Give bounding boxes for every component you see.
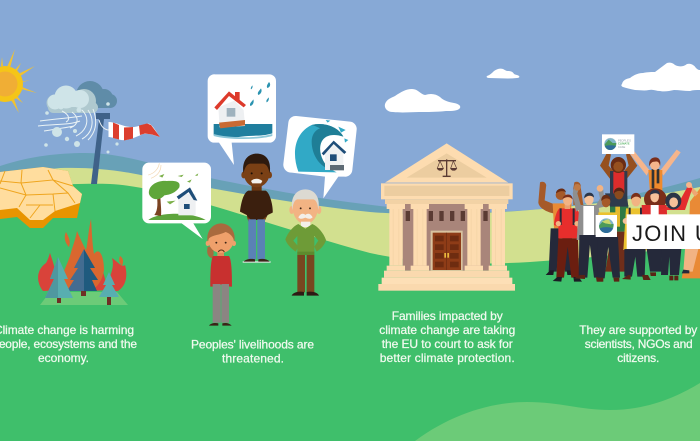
- steps: [378, 271, 515, 291]
- supporter: woman raised on shoulders, brown arms: [600, 153, 637, 203]
- supporter: man in orange, fists raised: [538, 182, 583, 275]
- panel: people and their livelihoods: [142, 74, 357, 326]
- text: families taking EU to court: the EU to court to ask for: [382, 337, 513, 351]
- text: families taking EU to court: climate change are taking: [379, 323, 515, 337]
- figure: older man in green sweater: [285, 189, 326, 296]
- wall: [403, 203, 490, 271]
- icon: scales of justice: [437, 159, 457, 176]
- hill: teal back: [0, 153, 700, 441]
- panel: crowd of supporters: [538, 134, 700, 282]
- cloud: large right: [621, 63, 700, 91]
- icon: sun: [0, 49, 37, 113]
- icon: forest fire: [38, 219, 128, 305]
- supporter: woman holding sign: [596, 195, 620, 282]
- supporter: man in red backpack shirt: [553, 194, 582, 282]
- cloud: small left: [385, 89, 460, 112]
- text: supporters: They are supported by: [579, 323, 697, 337]
- speech bubble: storm: [142, 163, 211, 239]
- supporter: central man in green, on whose shoulders she stands: [605, 187, 628, 272]
- entablature: [381, 183, 513, 204]
- icon: cracked dry land: [0, 167, 82, 228]
- panel: climate impacts illustration: [0, 49, 160, 305]
- small banner with logo: CLIMATE: [618, 142, 630, 146]
- text: livelihoods threatened: Peoples' livelihoods are: [191, 338, 314, 352]
- hill: light green foreground: [415, 383, 700, 441]
- text: families taking EU to court: Families impacted by: [392, 309, 503, 323]
- cloud: tiny: [487, 69, 519, 78]
- speech bubble: tsunami: [283, 116, 357, 198]
- supporter: man in grey jacket: [573, 184, 605, 282]
- supporter: woman raised on shoulders, orange top: [628, 150, 681, 193]
- supporter: dark-haired woman with raised arm: [660, 182, 692, 210]
- text: supporters: scientists, NGOs and: [585, 337, 693, 351]
- small banner with logo: [602, 134, 634, 154]
- text: climate change is harming: economy.: [38, 351, 89, 365]
- pediment: [385, 143, 508, 183]
- supporter: person at far right: [682, 184, 700, 278]
- figure: man in dark sweater: [240, 154, 273, 263]
- crowd legs below banner: [622, 249, 681, 280]
- icon: windsock on pole: [91, 113, 160, 184]
- windows: [406, 211, 488, 221]
- hill: main green: [0, 184, 700, 441]
- banner: join us: [627, 214, 700, 249]
- icon: storm clouds and wind: [38, 81, 119, 154]
- sign with logo: [596, 215, 617, 237]
- speech bubble: flood: [208, 74, 276, 165]
- figure: woman in red: [206, 223, 236, 326]
- text: livelihoods threatened: threatened.: [222, 352, 284, 366]
- supporter: man in yellow: [623, 193, 647, 250]
- columns: [387, 204, 507, 271]
- small banner with logo: PEOPLE'S: [618, 138, 631, 142]
- text: supporters: citizens.: [617, 351, 659, 365]
- supporter: curly-haired woman in red: [642, 188, 668, 249]
- door: [431, 231, 463, 271]
- panel: courthouse: [378, 143, 515, 291]
- text: families taking EU to court: better climate protection.: [380, 351, 515, 365]
- hill: pale green: [0, 168, 700, 441]
- small banner with logo: CASE: [618, 145, 625, 149]
